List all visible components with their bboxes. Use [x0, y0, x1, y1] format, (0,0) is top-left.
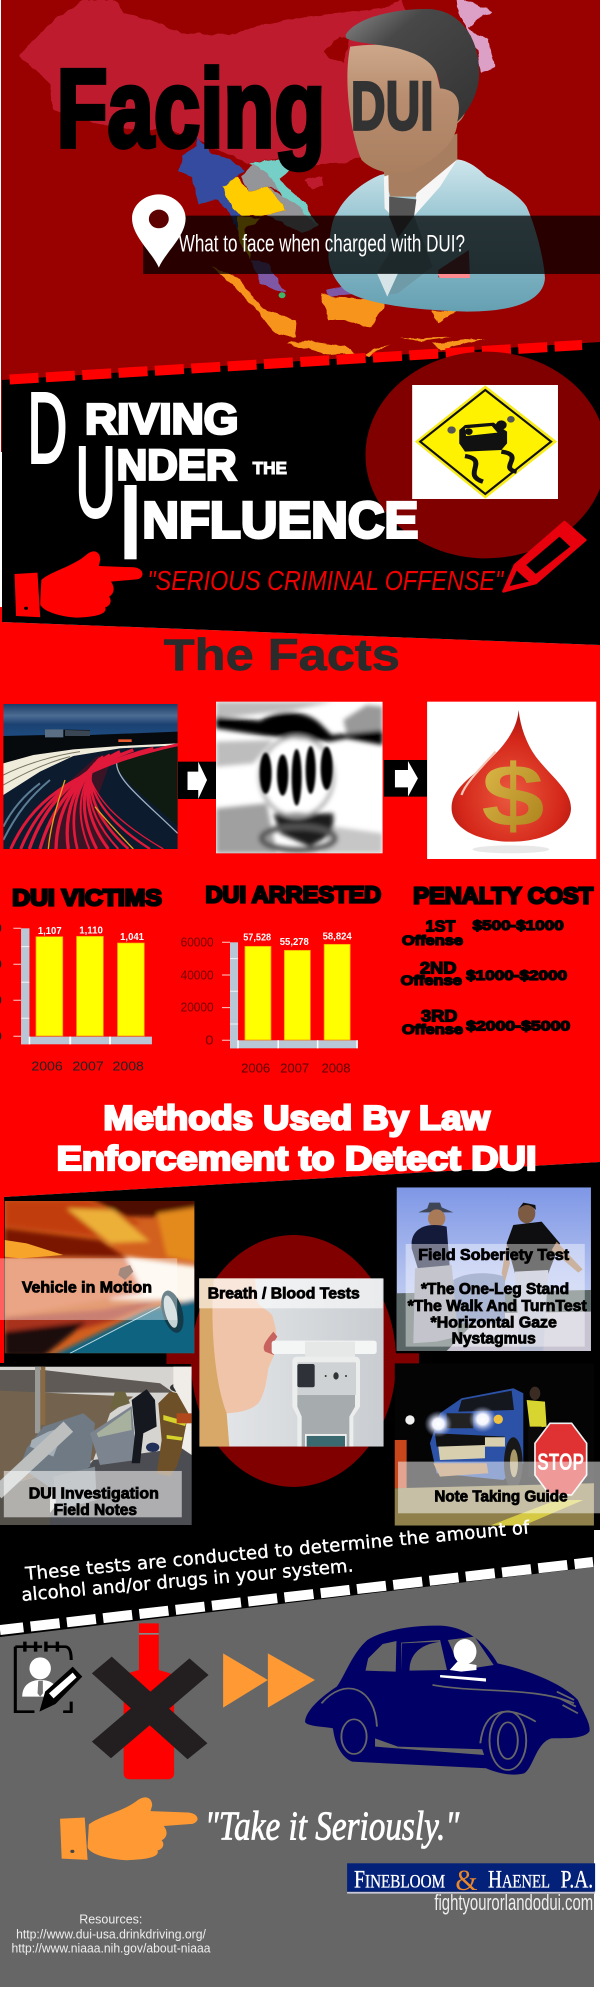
- heading: dui arrested: DUI ARRESTED: [206, 883, 381, 908]
- penalty cost table: 3RD: [421, 1007, 457, 1025]
- logo: finebloom and haenel: FINEBLOOM: [354, 1865, 445, 1893]
- heading: methods: Methods Used By Law: [103, 1099, 490, 1137]
- resources: http://www.niaaa.nih.gov/about-niaaa: [11, 1941, 210, 1956]
- heading: driving under the influence: NDER: [117, 440, 237, 489]
- bar chart: dui arrested: 2008: [321, 1061, 351, 1075]
- bar chart: dui victims: 2008: [113, 1059, 144, 1073]
- heading: driving under the influence: [28, 372, 418, 559]
- image card: vehicle in motion: [0, 1197, 200, 1357]
- image card: dui investigation field notes: [0, 1367, 192, 1525]
- image card: note taking guide: [395, 1363, 600, 1526]
- map of southeast asia: [19, 0, 495, 357]
- icon: bottle crossed out: [92, 1623, 209, 1779]
- arrows: orange double triangle: [223, 1653, 315, 1708]
- panel: take it seriously footer: [11, 1623, 595, 1956]
- panel: header Facing DUI: [19, 0, 600, 357]
- penalty cost table: $500-$1000: [473, 918, 564, 934]
- icon: location pin: [132, 194, 186, 268]
- resources: [11, 1912, 210, 1956]
- penalty cost table: $1000-$2000: [466, 968, 567, 984]
- image card: field sobriety test: [397, 1187, 591, 1351]
- image card: field sobriety test: Field Soberiety Test: [418, 1247, 570, 1264]
- divider: white dashed line: [0, 1562, 593, 1630]
- panel: facts images and charts: [0, 702, 596, 1075]
- image card: breath and blood tests: Breath / Blood Tests: [208, 1285, 360, 1302]
- heading: driving under the influence: RIVING: [85, 394, 238, 443]
- bar chart: dui arrested: 55,278: [280, 937, 309, 948]
- bar chart: dui arrested: 0: [205, 1033, 214, 1047]
- divider: red dashed line: [10, 345, 582, 380]
- heading: methods: [57, 1099, 537, 1177]
- penalty cost table: [401, 917, 570, 1038]
- bar chart: dui arrested: 20000: [181, 999, 214, 1014]
- title: Facing: Facing: [57, 47, 325, 171]
- title: DUI: DUI: [351, 67, 434, 144]
- penalty cost table: Offense: [402, 1022, 463, 1038]
- image: blurred figures: [216, 702, 383, 853]
- image card: field sobriety test: *The One-Leg Stand: [421, 1281, 569, 1298]
- icon: drunk driving road sign: [412, 385, 558, 499]
- penalty cost table: Offense: [402, 933, 463, 949]
- bar chart: dui arrested: 60000: [181, 934, 214, 949]
- icon: navy car with driver: [305, 1626, 590, 1775]
- heading: driving under the influence: THE: [253, 458, 287, 478]
- heading: driving under the influence: U: [75, 426, 116, 538]
- arrow: first: [178, 762, 216, 799]
- man illustration: [328, 9, 545, 312]
- logo: finebloom and haenel: &: [455, 1863, 478, 1896]
- heading: driving under the influence: D: [28, 372, 67, 484]
- image: blood drop with dollar sign: $: [481, 747, 545, 845]
- image card: dui investigation field notes: DUI Investigation: [29, 1485, 159, 1502]
- bar chart: dui victims: 1,110: [79, 925, 103, 936]
- icon: singapore dot: [279, 292, 285, 298]
- image card: vehicle in motion: Vehicle in Motion: [22, 1279, 152, 1296]
- dark red circle backdrop: [166, 1235, 419, 1487]
- penalty cost table: Offense: [401, 973, 462, 989]
- bar chart: dui victims: 1,107: [38, 926, 62, 937]
- panel: methods used by law enforcement: [0, 1099, 600, 1526]
- heading: dui victims: DUI VICTIMS: [12, 886, 162, 911]
- dark caption band: [143, 216, 600, 274]
- icon: orange pointing hand: [60, 1797, 198, 1860]
- bar chart: dui arrested: 57,528: [243, 932, 271, 943]
- image: highway light trails: [3, 704, 178, 849]
- image card: note taking guide: Note Taking Guide: [434, 1489, 568, 1505]
- image card: dui investigation field notes: Field Notes: [54, 1502, 137, 1519]
- image card: breath and blood tests: [199, 1278, 384, 1447]
- bar chart: dui arrested: 40000: [181, 967, 214, 982]
- icon: red pointing hand: [15, 551, 142, 618]
- logo: finebloom and haenel: HAENEL: [488, 1865, 550, 1893]
- arrow: second: [384, 760, 429, 797]
- bar chart: dui victims: [0, 921, 152, 1073]
- resources: http://www.dui-usa.drinkdriving.org/: [16, 1927, 206, 1942]
- bar chart: dui victims: 2006: [31, 1059, 63, 1073]
- text: tests explanation: These tests are conducted to determine the amount of: [24, 1517, 531, 1585]
- penalty cost table: $2000-$5000: [466, 1019, 570, 1034]
- penalty cost table: 2ND: [420, 958, 457, 977]
- bar chart: dui victims: 1,041: [120, 932, 144, 943]
- heading: methods: Enforcement to Detect DUI: [57, 1139, 537, 1177]
- bar chart: dui arrested: 58,824: [323, 931, 352, 942]
- image card: field sobriety test: Nystagmus: [452, 1330, 536, 1347]
- image card: field sobriety test: *Horizontal Gaze: [431, 1315, 557, 1331]
- quote: take it seriously: "Take it Seriously.": [205, 1802, 459, 1849]
- penalty cost table: 1ST: [426, 917, 456, 935]
- bar chart: dui arrested: 2006: [241, 1061, 270, 1075]
- image: blood drop with dollar sign: [427, 702, 596, 859]
- bar chart: dui arrested: 2007: [280, 1061, 309, 1075]
- text: tests explanation: alcohol and/or drugs in your system.: [21, 1555, 354, 1606]
- resources: Resources:: [79, 1912, 142, 1927]
- heading: the facts: The Facts: [164, 631, 400, 680]
- icon: notepad with person and pencil: [15, 1642, 82, 1712]
- icon: red pencil: [503, 522, 586, 592]
- heading: driving under the influence: NFLUENCE: [142, 492, 418, 548]
- dark red circle: [365, 352, 600, 558]
- logo: finebloom and haenel: [347, 1863, 595, 1896]
- bar chart: dui victims: 2007: [72, 1059, 104, 1073]
- bar chart: dui arrested: [181, 931, 358, 1075]
- panel: driving under the influence: [15, 352, 600, 618]
